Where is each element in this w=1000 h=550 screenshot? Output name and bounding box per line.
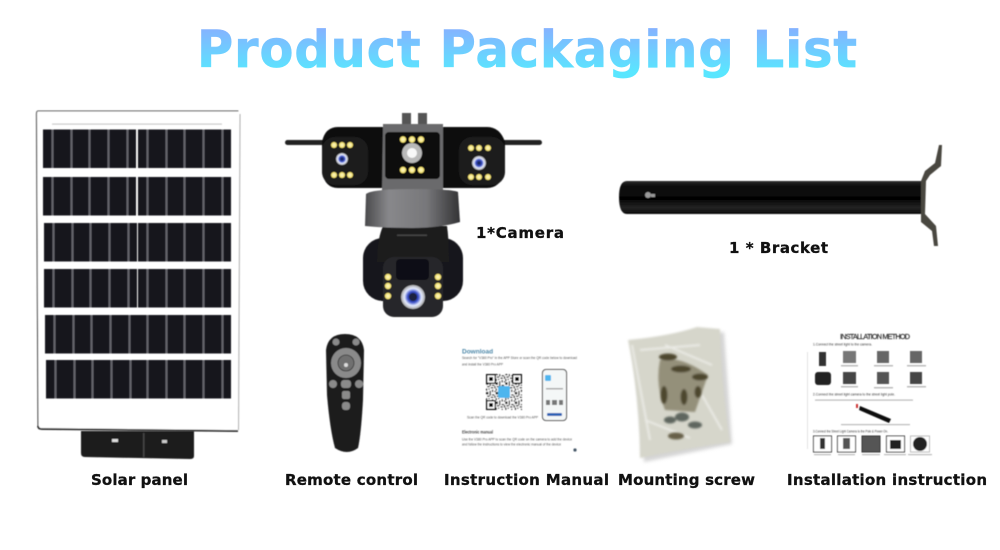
step 1 images [815,351,926,388]
title: Product Packaging List [197,21,858,80]
label: mounting screw: Mounting screw [618,471,755,489]
manual page mark [573,448,577,452]
manual electronic heading: Electronic manual [462,430,493,434]
screw bag highlights [632,345,722,440]
remote buttons [329,338,363,410]
solar panel mount [81,431,194,459]
manual QR code [486,374,522,410]
left module [322,137,368,185]
sheet heading: INSTALLATION METHOD [840,332,910,341]
step 2 caption lines [815,400,913,425]
screw bag [628,327,730,458]
dome face plate [383,257,443,317]
manual QR caption: Scan the QR code to download the V380 Pro APP [467,416,539,420]
panel: installation method sheet [807,332,932,455]
manual download heading: Download [462,348,493,356]
panel: instruction manual [462,348,577,452]
manual electronic text [462,438,572,446]
label: bracket: 1 * Bracket [729,239,828,257]
manual phone [542,370,566,420]
right module [459,137,505,185]
bracket flange [921,145,942,246]
manual intro text: Search for "V380 Pro" in the APP Store or scan the QR code below to download [462,356,577,360]
bracket tube [619,181,923,214]
sheet edge [807,352,808,449]
panel: solar panel [36,111,240,459]
panel: bracket [619,145,942,246]
manual intro text [462,356,577,366]
step 1 text: 1.Connect the street light to the camera. [813,342,872,346]
solar panel frame [36,111,240,431]
camera top housing [322,127,505,188]
label: instruction manual: Instruction Manual [444,471,609,489]
step 2 pole image [856,404,891,423]
screws [658,354,708,440]
remote body [326,334,364,452]
label: camera: 1*Camera [476,224,564,242]
bracket screw [645,192,655,198]
camera lower dome [363,226,463,301]
step 3 text: 3.Connect the Street Light Camera to the Pole & Power On. [813,428,888,434]
screw bag shadow [634,332,732,462]
manual intro text: and install the V380 Pro APP [462,362,504,366]
panel: mounting screw [628,327,732,462]
label: solar panel: Solar panel [91,471,188,489]
solar cell rows [43,130,231,398]
panel: remote control [326,334,364,452]
label: remote control: Remote control [285,471,418,489]
manual electronic text: Use the V380 Pro APP to scan the QR code on the camera to add the device [462,438,572,442]
step 2 text: 2.Connect the street light camera to the street light pole. [813,392,895,396]
label: installation instruction: Installation instruction [787,471,987,489]
camera neck ring [365,189,460,228]
panel: camera [285,113,542,317]
step 3 images [814,436,932,455]
camera antennas [285,113,542,145]
centre module [382,124,443,190]
manual electronic text: and follow the instructions to view the electronic manual of the device [462,442,561,446]
